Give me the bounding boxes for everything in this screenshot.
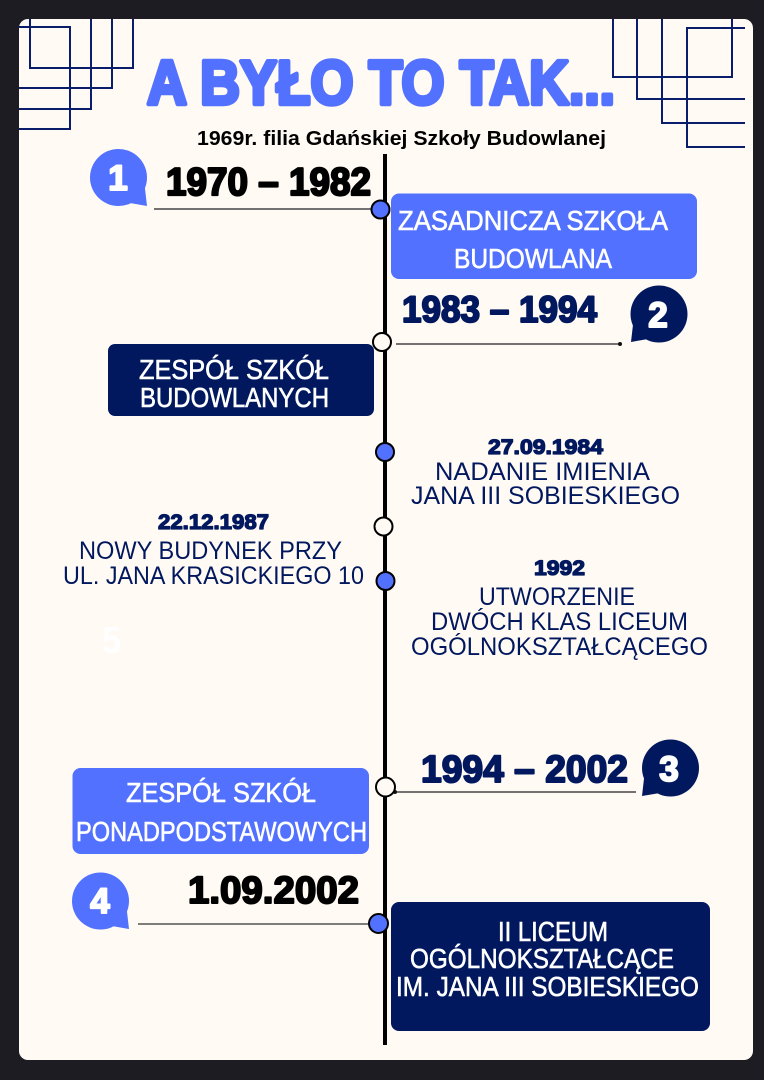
timeline dot 5 [376,572,394,590]
step 2 badge: 2 [648,296,668,335]
box: Zespół Szkół Ponadpodstawowych: PONADPODSTAWOWYCH [76,816,367,847]
connector line 3 [393,790,636,794]
box: Zespół Szkół Budowlanych: ZESPÓŁ SZKÓŁ [139,354,329,385]
box: Zasadnicza Szkoła Budowlana: ZASADNICZA SZKOŁA [398,205,668,236]
event: 1992: OGÓLNOKSZTAŁCĄCEGO [411,632,708,661]
year range 1983 – 1994: 1983 – 1994 [402,289,597,330]
decorative squares top right [613,19,745,147]
step 4 badge [72,872,129,930]
timeline dot 2 [373,333,391,351]
step 2 badge [630,286,688,342]
decorative squares top left [19,19,133,129]
event: 22.12.1987: NOWY BUDYNEK PRZY [79,537,342,565]
step 3 badge: 3 [659,750,679,789]
timeline dot 4 [374,518,392,536]
timeline axis [383,154,387,1045]
timeline dot 6 [376,778,395,796]
faint white number 5: 5 [102,620,121,662]
timeline dot 1 [372,200,390,218]
date 1.09.2002: 1.09.2002 [188,870,359,912]
step 3 badge [642,740,699,796]
event: 27.09.1984: 27.09.1984 [488,436,603,459]
event: 1992: UTWORZENIE [479,583,635,611]
box: Zespół Szkół Budowlanych: BUDOWLANYCH [140,382,329,413]
box: Zespół Szkół Ponadpodstawowych [72,768,369,854]
event: 1992: DWÓCH KLAS LICEUM [431,607,688,636]
box: II Liceum Ogólnokształcące [391,902,710,1031]
timeline dot 7 [369,914,388,933]
event: 22.12.1987: UL. JANA KRASICKIEGO 10 [63,562,364,590]
event: 27.09.1984 [411,436,680,510]
event: 27.09.1984: JANA III SOBIESKIEGO [411,482,680,510]
step 1 badge: 1 [108,159,128,198]
event: 22.12.1987: 22.12.1987 [158,511,269,534]
box: II Liceum Ogólnokształcące: IM. JANA III SOBIESKIEGO [396,971,699,1002]
box: Zasadnicza Szkoła Budowlana: BUDOWLANA [454,243,612,274]
year range 1994 – 2002: 1994 – 2002 [421,749,628,791]
box: II Liceum Ogólnokształcące: OGÓLNOKSZTAŁCĄCE [410,943,674,974]
connector line 4 [138,923,368,925]
step 4 badge: 4 [90,882,110,921]
subtitle: 1969r. filia Gdańskiej Szkoły Budowlanej [197,128,606,150]
event: 22.12.1987 [63,511,364,590]
timeline dot 3 [376,443,394,461]
box: Zespół Szkół Budowlanych [108,344,374,416]
event: 27.09.1984: NADANIE IMIENIA [435,458,650,486]
connector line 1 [154,208,372,210]
connector line 2 [396,342,622,346]
step 1 badge [90,149,147,206]
box: Zasadnicza Szkoła Budowlana [391,194,697,279]
title: A BYŁO TO TAK... [147,49,615,118]
event: 1992 [411,557,708,661]
box: Zespół Szkół Ponadpodstawowych: ZESPÓŁ SZKÓŁ [126,777,316,808]
year range 1970 – 1982: 1970 – 1982 [166,161,371,204]
box: II Liceum Ogólnokształcące: II LICEUM [498,916,608,947]
event: 1992: 1992 [534,557,585,580]
